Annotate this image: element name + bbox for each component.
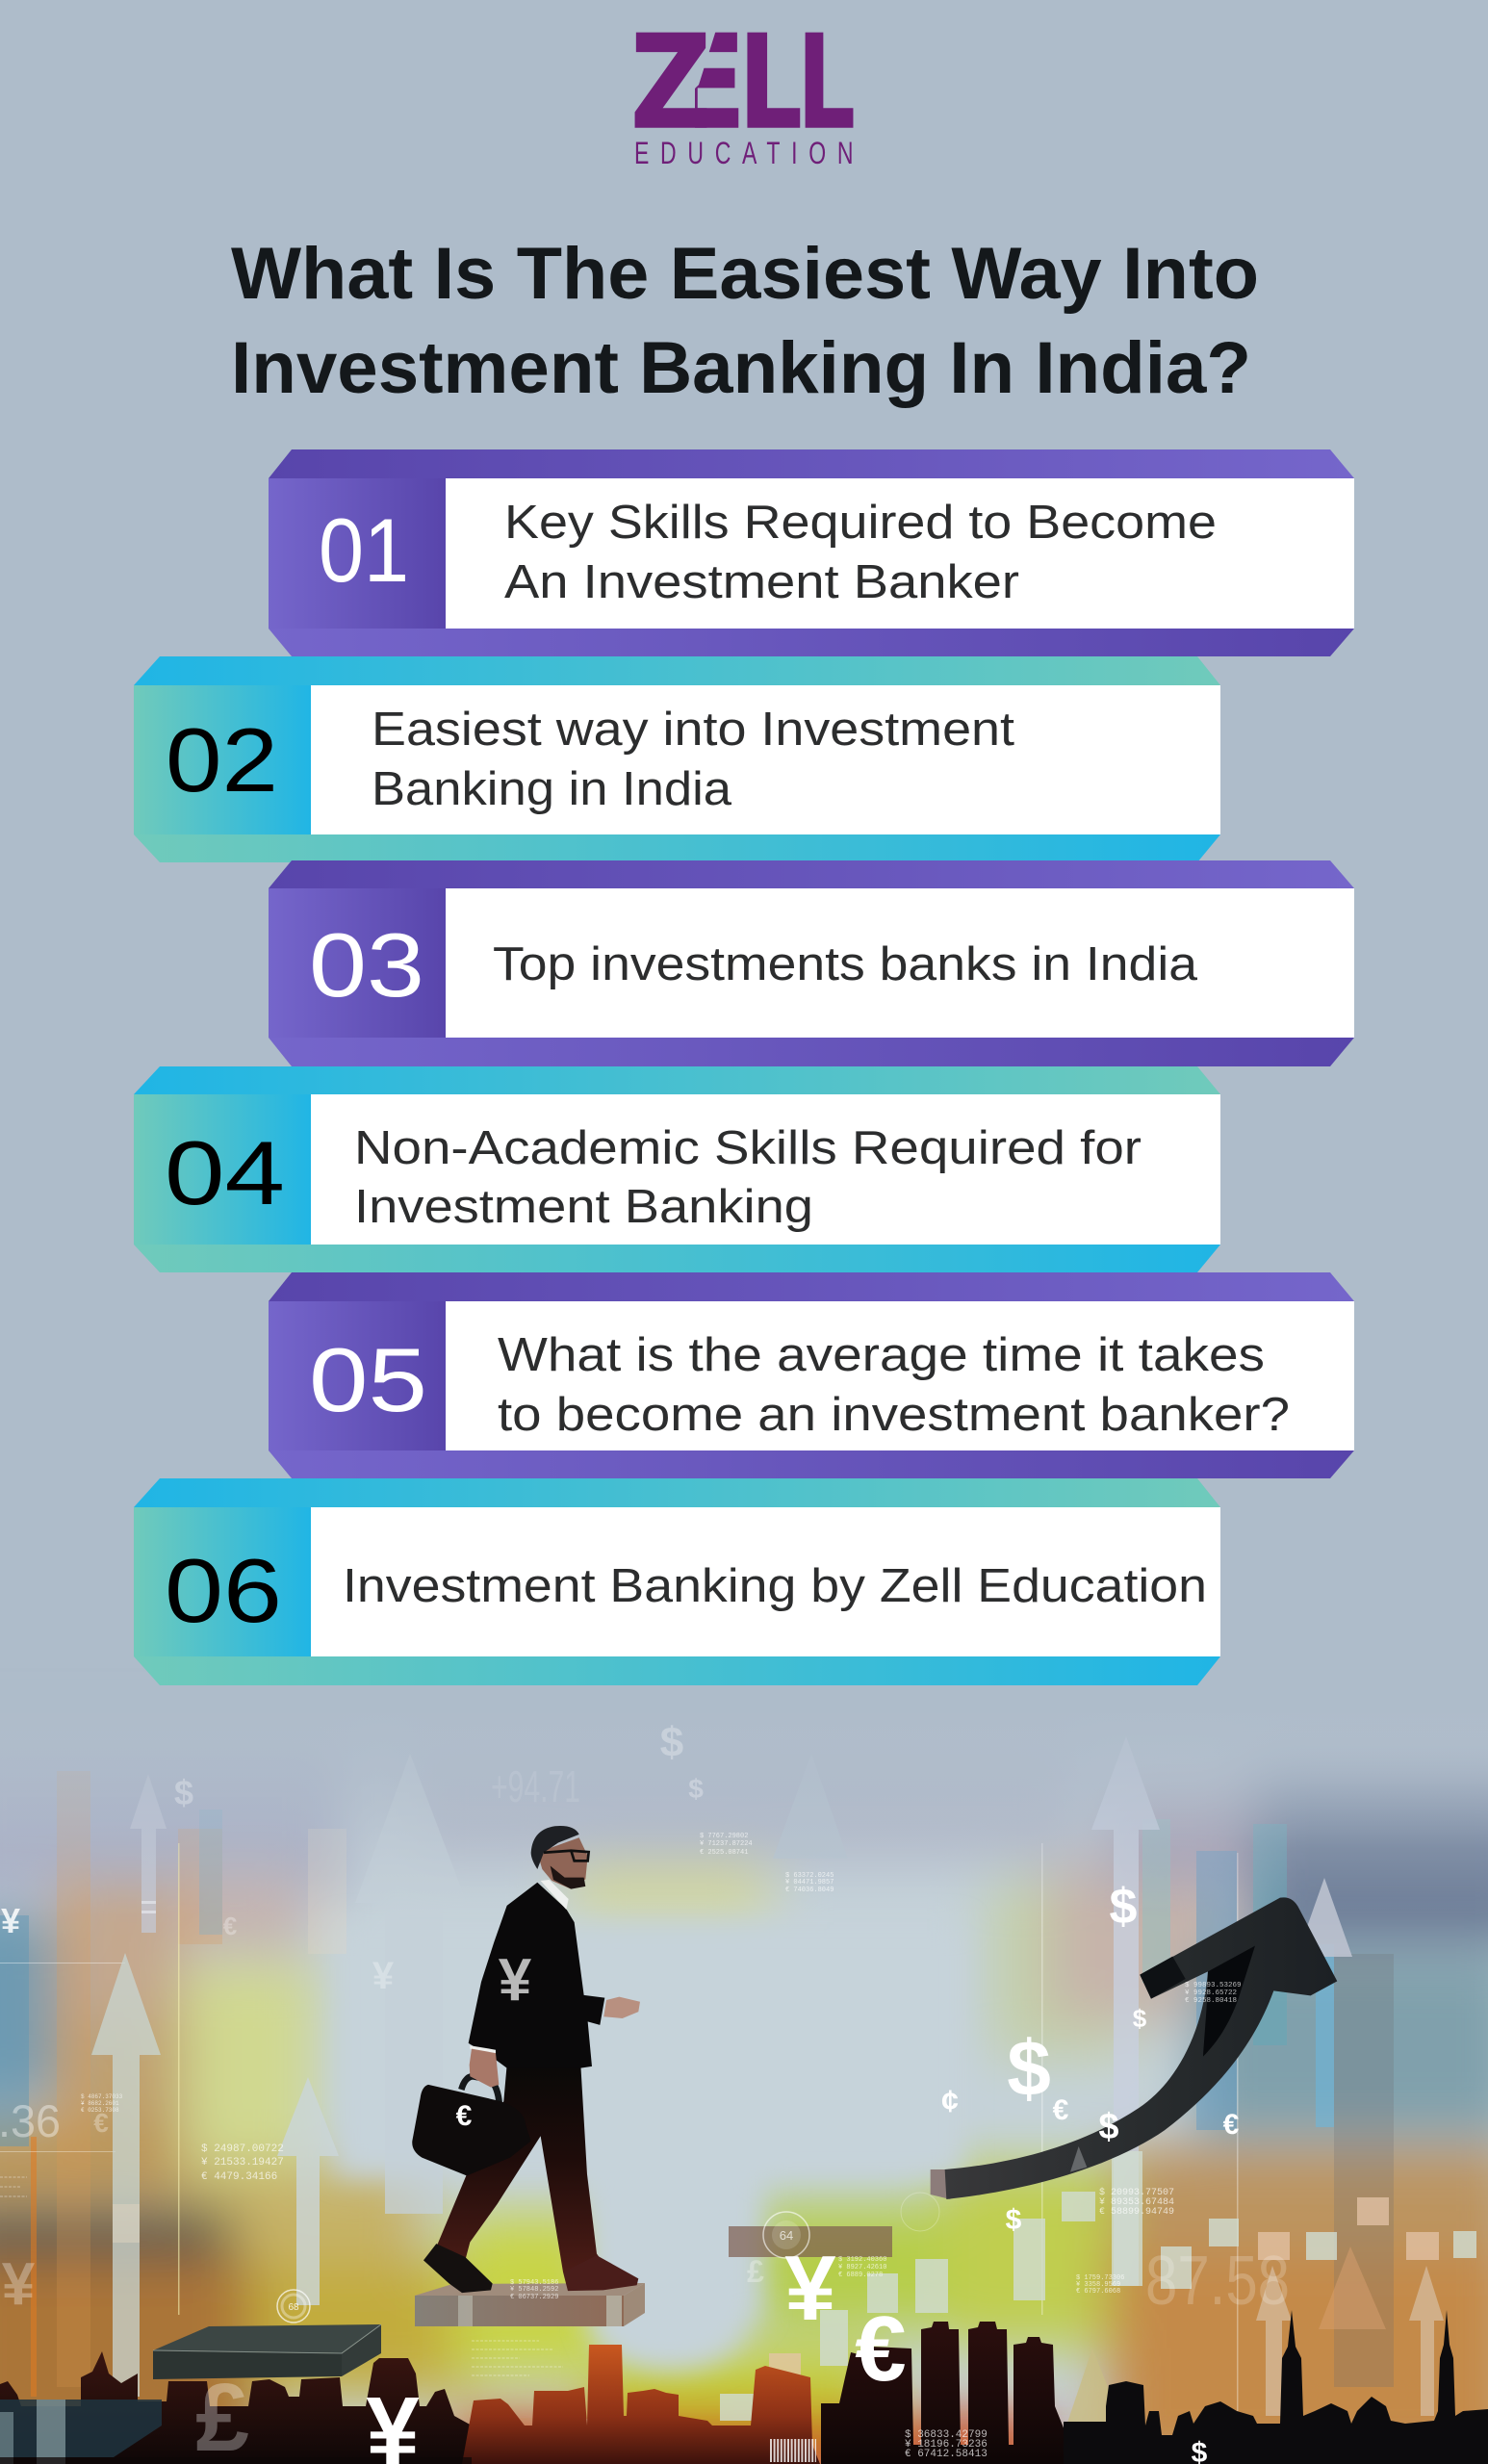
small data readouts: ¥ 18196.73236 (905, 2439, 988, 2451)
small data readouts: € 74036.8049 (785, 1886, 834, 1894)
currency symbols: white: $ (1133, 2004, 1147, 2033)
small data readouts: ¥ 57848.2592 (510, 2286, 558, 2294)
peach squares (525, 2197, 1439, 2464)
small data readouts (81, 1833, 1242, 2460)
logo: Zell Education: Z (630, 8, 711, 158)
panel: item 02 (134, 656, 1220, 862)
small data readouts: $ 63372.0245 (785, 1872, 834, 1880)
currency symbols: white: ¢ (941, 2084, 959, 2118)
faint numerals: 87.58 (1145, 2243, 1290, 2320)
ghost platform bottom left (0, 2400, 472, 2464)
logo: Zell Education: L (797, 8, 855, 158)
beard (551, 1866, 585, 1889)
logo: Zell Education: EDUCATION (634, 136, 854, 170)
small data readouts: ¥ 8927.42610 (838, 2264, 886, 2272)
small data readouts: $ 3192.40360 (838, 2256, 886, 2264)
glasses (544, 1851, 589, 1861)
currency symbols: faint (2, 1719, 764, 2464)
panel: item 05 (269, 1272, 1354, 1478)
title: Investment Banking In India? (231, 327, 1251, 409)
logo: Zell Education: L (739, 8, 803, 158)
logo: Zell Education: E (662, 8, 747, 158)
small data readouts: € 2525.08741 (700, 1849, 748, 1857)
panel: item 02: Banking in India (372, 763, 732, 815)
currency symbols: white: $ (1098, 2107, 1119, 2147)
currency symbols: faint: ¥ (372, 1955, 395, 1997)
businessman walking with briefcase (412, 1826, 640, 2293)
code text lines (0, 2177, 563, 2375)
band with dial: 64 (780, 2228, 793, 2243)
small data readouts: ¥ 9928.65722 (1185, 1989, 1237, 1997)
panel: item 04: Non-Academic Skills Required for (354, 1122, 1142, 1174)
small data readouts: ¥ 89353.67484 (1099, 2197, 1174, 2208)
small data readouts: ¥ 21533.19427 (201, 2157, 284, 2169)
currency symbols: white: € (1223, 2109, 1240, 2141)
illustration top fade (0, 1684, 1488, 1848)
small data readouts: ¥ 8682.2601 (81, 2100, 119, 2107)
small data readouts: ¥ 71237.87224 (700, 1840, 753, 1848)
small data readouts: € 6797.6068 (1076, 2288, 1120, 2296)
panel: item 06 (134, 1478, 1220, 1685)
upper haze over arrows (0, 1694, 1488, 1915)
skyline silhouette: maroon towers (821, 2322, 1066, 2464)
small data readouts: € 58899.94749 (1099, 2207, 1174, 2218)
panel: item 06: 06 (165, 1540, 282, 1641)
trousers (436, 2065, 609, 2272)
small data readouts: € 9258.80418 (1185, 1997, 1237, 2005)
panel: item 04 (134, 1066, 1220, 1272)
skyline silhouette: dark buildings (0, 2351, 472, 2464)
panel: item 01 (269, 449, 1354, 656)
small data readouts: € 06737.2929 (510, 2294, 558, 2301)
panel: item 05: to become an investment banker? (498, 1389, 1290, 1441)
face (537, 1837, 588, 1889)
band with dial (729, 2212, 892, 2258)
small data readouts: $ 57943.5186 (510, 2279, 558, 2287)
translucent up arrows (91, 1736, 1444, 2426)
front hand (603, 1997, 640, 2018)
light stone step (415, 2283, 645, 2326)
small data readouts: $ 7767.29802 (700, 1833, 748, 1840)
small data readouts: € 4479.34166 (201, 2171, 277, 2183)
panel: item 03 (269, 860, 1354, 1066)
translucent squares and bars (720, 2151, 1476, 2421)
briefcase handle (461, 2076, 500, 2103)
dial 68 (277, 2193, 939, 2323)
small data readouts: € 0253.7308 (81, 2107, 119, 2114)
currency symbols: white: ¥ (784, 2237, 836, 2340)
front shoe (563, 2255, 638, 2291)
currency symbols: white: $ (1006, 2204, 1022, 2236)
dial 68: 68 (288, 2302, 299, 2313)
panel: item 02: Easiest way into Investment (372, 704, 1014, 756)
currency symbols: white: $ (1007, 2025, 1051, 2113)
panel: item 01: Key Skills Required to Become (504, 497, 1217, 549)
back shoe (423, 2244, 493, 2293)
small data readouts: € 67412.58413 (905, 2449, 988, 2460)
dark stone step (153, 2324, 381, 2379)
currency symbols: white: € (1053, 2094, 1069, 2126)
small data readouts: $ 1759.73306 (1076, 2274, 1124, 2282)
currency symbols: white (1, 1879, 1240, 2464)
illustration sky glow (0, 1713, 1488, 2464)
small data readouts: $ 20993.77507 (1099, 2187, 1174, 2198)
faint numerals: +94.71 (491, 1761, 580, 1811)
currency symbols: faint: £ (747, 2254, 764, 2289)
panel: item 06: Investment Banking by Zell Education (343, 1560, 1207, 1612)
panel: item 01: An Investment Banker (504, 556, 1019, 608)
briefcase (412, 2085, 531, 2176)
barcode (770, 2439, 816, 2462)
logo: Zell Education (635, 33, 853, 164)
currency symbols: faint: $ (174, 1773, 193, 1812)
currency symbols: faint: € (93, 2108, 109, 2138)
yen on sleeve: ¥ (499, 1947, 532, 2014)
currency symbols: faint: € (223, 1912, 237, 1940)
small data readouts: ¥ 04471.9857 (785, 1879, 834, 1886)
panel: item 05: 05 (309, 1329, 427, 1430)
shirt cuff (470, 2045, 496, 2057)
panel: item 05: What is the average time it takes (498, 1329, 1265, 1381)
panel: item 01: 01 (319, 500, 409, 601)
jacket (469, 1883, 604, 2068)
panel: item 02: 02 (166, 709, 278, 810)
small data readouts: $ 4867.37033 (81, 2093, 123, 2100)
small data readouts: $ 99893.53269 (1185, 1982, 1242, 1989)
title (231, 233, 1259, 409)
currency symbols: white: ¥ (1, 1901, 20, 1940)
currency symbols: faint: $ (688, 1774, 704, 1804)
rising black arrow (931, 1897, 1337, 2199)
small data readouts: $ 36833.42799 (905, 2429, 988, 2441)
faint numerals (0, 1761, 1290, 2320)
currency symbols: faint: ¥ (2, 2251, 36, 2318)
small data readouts: € 6889.0278 (838, 2272, 883, 2279)
currency symbols: faint: $ (660, 1719, 683, 1766)
hair (531, 1826, 579, 1869)
panel: item 03: Top investments banks in India (493, 938, 1198, 990)
panel: bottom illustration (0, 1684, 1488, 2464)
small data readouts: $ 24987.00722 (201, 2143, 284, 2155)
panel: item 04: 04 (165, 1122, 285, 1223)
currency symbols: white: $ (1110, 1879, 1138, 1935)
skyline silhouette: orange-red buildings (462, 2345, 820, 2464)
panel: item 03: 03 (309, 914, 424, 1015)
translucent chart bars (0, 1771, 1394, 2411)
euro on briefcase: € (456, 2100, 473, 2132)
skyline silhouette: black right side (1064, 2310, 1488, 2464)
currency symbols: white: € (855, 2297, 907, 2400)
small data readouts: ¥ 3358.9569 (1076, 2281, 1120, 2289)
gripping hand (470, 2049, 499, 2088)
shirt collar (541, 1880, 569, 1910)
title: What Is The Easiest Way Into (231, 233, 1259, 315)
panel: item 04: Investment Banking (354, 1181, 813, 1233)
